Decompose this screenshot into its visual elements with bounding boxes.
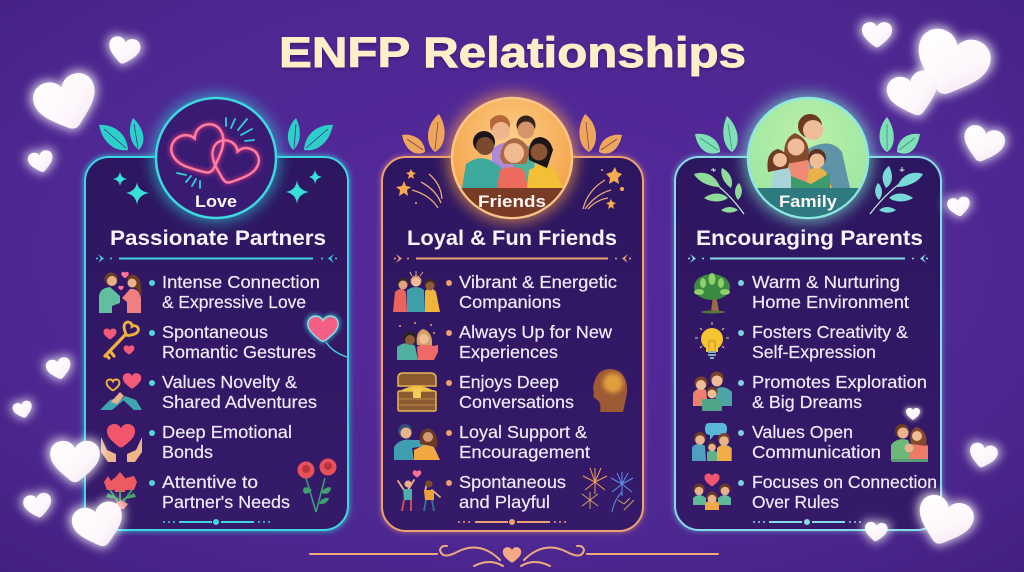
- bullet: [446, 430, 452, 436]
- roses: [298, 458, 336, 512]
- label: Love: Love: [195, 193, 237, 211]
- heart: [42, 354, 76, 384]
- item text: [752, 272, 909, 312]
- item text: Loyal Support &: [459, 422, 587, 442]
- item text: Warm & Nurturing: [752, 272, 900, 292]
- panel: friends: [382, 93, 643, 531]
- bullet: [446, 480, 452, 486]
- friends leaves: [402, 114, 622, 154]
- item text: Fosters Creativity &: [752, 322, 908, 342]
- fireworks: [582, 468, 634, 512]
- family embrace illustration: [891, 424, 928, 462]
- icon: adventure hands: [100, 373, 142, 410]
- item text: [162, 472, 290, 512]
- bullet: [446, 280, 452, 286]
- divider: [688, 254, 928, 263]
- friends group illustration: [461, 115, 563, 217]
- icon: two friends supporting: [394, 424, 440, 460]
- bullet: [149, 480, 155, 486]
- title: ENFP Relationships: [279, 31, 746, 79]
- heart: [908, 488, 981, 555]
- heart: [905, 407, 921, 421]
- heart: [26, 66, 108, 141]
- item text: Experiences: [459, 342, 558, 362]
- item text: [459, 272, 617, 312]
- bullet: [446, 380, 452, 386]
- bullet: [738, 480, 744, 486]
- item text: Promotes Exploration: [752, 372, 927, 392]
- icon: golden key: [104, 321, 140, 358]
- item text: Home Environment: [752, 292, 909, 312]
- love list items: [99, 272, 320, 512]
- icon: trio of friends: [393, 271, 440, 312]
- bullet: [149, 280, 155, 286]
- item text: Over Rules: [752, 492, 839, 512]
- bullet: [738, 330, 744, 336]
- item text: Spontaneous: [459, 472, 566, 492]
- item text: [162, 322, 316, 362]
- icon: reading family: [693, 372, 732, 411]
- label: Family: Family: [779, 193, 838, 211]
- heart: [860, 20, 894, 49]
- neon hearts icon: [167, 120, 262, 190]
- glowing head: [593, 369, 627, 412]
- item text: Shared Adventures: [162, 392, 317, 412]
- friends list items: [393, 271, 617, 512]
- label: Friends: Friends: [478, 193, 546, 211]
- icon: talking family: [692, 423, 732, 461]
- icon: couple: [99, 272, 142, 313]
- bullet: [149, 380, 155, 386]
- heart: [881, 65, 947, 124]
- icon: tree: [694, 273, 730, 314]
- icon: lightbulb: [695, 322, 729, 358]
- item text: Bonds: [162, 442, 213, 462]
- heading: Encouraging Parents: Encouraging Parents: [696, 226, 923, 250]
- heart balloon: [306, 314, 347, 357]
- heart: [944, 194, 974, 220]
- item text: [162, 372, 317, 412]
- item text: Self-Expression: [752, 342, 876, 362]
- love sparkles: [113, 170, 322, 205]
- item text: Partner's Needs: [162, 492, 290, 512]
- icon: hands holding heart: [101, 424, 142, 462]
- item text: Vibrant & Energetic: [459, 272, 617, 292]
- love leaves: [99, 118, 333, 150]
- item text: [162, 272, 320, 312]
- item text: Spontaneous: [162, 322, 268, 342]
- item text: & Big Dreams: [752, 392, 862, 412]
- friends fireworks: [396, 167, 624, 209]
- neon rays: [177, 118, 254, 188]
- heart: [47, 439, 103, 484]
- item text: [459, 372, 574, 412]
- heart: [862, 519, 890, 544]
- item text: Attentive to: [162, 472, 258, 492]
- family leaves: [695, 116, 920, 154]
- item text: and Playful: [459, 492, 550, 512]
- item text: [752, 472, 937, 512]
- heart: [66, 496, 132, 555]
- heart: [956, 120, 1010, 169]
- bullet: [446, 330, 452, 336]
- item text: & Expressive Love: [162, 292, 306, 312]
- item text: [162, 422, 292, 462]
- panel frame: love: [85, 157, 348, 530]
- family branches: [694, 166, 923, 214]
- item text: Romantic Gestures: [162, 342, 316, 362]
- family circle badge: [743, 93, 873, 223]
- title: ENFP Relationships: [279, 29, 746, 77]
- panel frame: family: [675, 157, 941, 530]
- heart: [964, 439, 1002, 472]
- heading: Passionate Partners: Passionate Partners: [110, 226, 326, 250]
- item text: Enjoys Deep: [459, 372, 559, 392]
- item text: Values Novelty &: [162, 372, 297, 392]
- icon: tulip bouquet: [104, 472, 137, 509]
- divider: [394, 254, 631, 263]
- icon: playful jumpers: [398, 470, 440, 511]
- item text: [752, 422, 881, 462]
- family illustration: [757, 114, 859, 217]
- panel: love: [85, 94, 348, 530]
- bottom ornament: [458, 519, 566, 525]
- bottom ornament: [753, 519, 861, 525]
- icon: excited friends: [397, 322, 438, 360]
- item text: [459, 472, 566, 512]
- bullet: [738, 430, 744, 436]
- item text: Focuses on Connection: [752, 472, 937, 492]
- item text: Values Open: [752, 422, 853, 442]
- item text: Deep Emotional: [162, 422, 292, 442]
- heading: Loyal & Fun Friends: Loyal & Fun Friends: [407, 226, 617, 250]
- bullet: [149, 330, 155, 336]
- item text: Conversations: [459, 392, 574, 412]
- family list items: [692, 272, 937, 512]
- icon: connected family: [693, 474, 731, 510]
- item text: Communication: [752, 442, 881, 462]
- bullet: [149, 430, 155, 436]
- bottom ornament: [163, 519, 270, 525]
- heart: [20, 490, 56, 522]
- bullet: [738, 380, 744, 386]
- footer flourish: [310, 546, 718, 566]
- heart: [904, 21, 999, 108]
- panel: family: [675, 93, 941, 530]
- item text: Intense Connection: [162, 272, 320, 292]
- friends circle badge: [447, 93, 577, 223]
- item text: [459, 322, 612, 362]
- panel frame: friends: [382, 157, 643, 531]
- heart: [10, 398, 36, 422]
- item text: [752, 322, 908, 362]
- icon: treasure chest: [398, 373, 436, 411]
- item text: Companions: [459, 292, 561, 312]
- item text: Always Up for New: [459, 322, 612, 342]
- item text: [752, 372, 927, 412]
- bullet: [738, 280, 744, 286]
- love circle badge: [152, 94, 280, 222]
- item text: Encouragement: [459, 442, 590, 462]
- heart: [24, 147, 58, 177]
- heart: [104, 33, 144, 68]
- divider: [96, 254, 337, 263]
- item text: [459, 422, 590, 462]
